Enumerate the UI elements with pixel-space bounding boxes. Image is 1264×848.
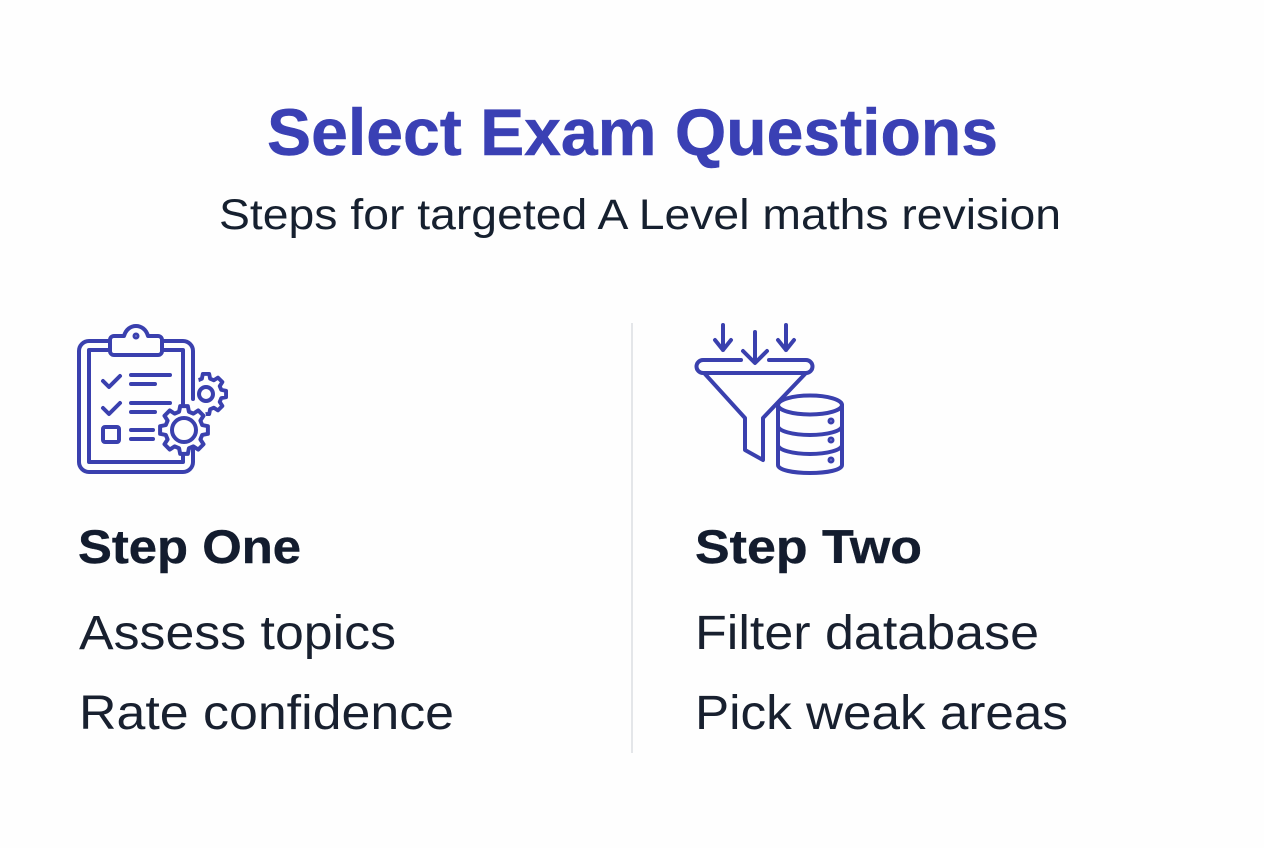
subtitle: Steps for targeted A Level maths revision [219, 191, 1061, 239]
heading: step two: Step Two [695, 520, 922, 573]
text: filter database: Filter database [695, 607, 1039, 660]
heading: step one: Step One [78, 520, 301, 573]
panel: step one [78, 326, 454, 740]
text: assess topics: Assess topics [79, 607, 396, 660]
text: rate confidence: Rate confidence [79, 687, 454, 740]
text: pick weak areas: Pick weak areas [695, 687, 1068, 740]
divider [631, 323, 633, 753]
icon: clipboard with gears [79, 326, 226, 472]
icon: small gear [197, 372, 228, 416]
title: Select Exam Questions [267, 95, 998, 169]
icon: large gear [160, 406, 208, 454]
panel: step two [695, 325, 1068, 740]
icon: funnel with database [696, 325, 842, 473]
